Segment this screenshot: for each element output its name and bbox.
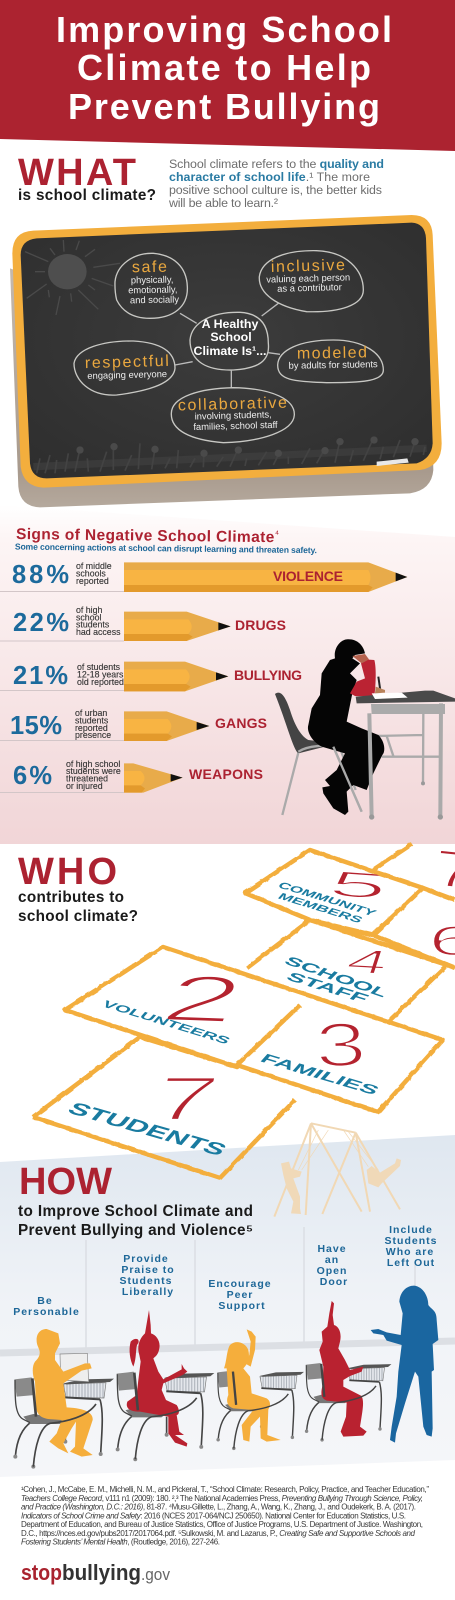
teacher: include students who are left out	[371, 1224, 438, 1443]
bubble: a healthy school climate is	[194, 317, 266, 358]
heading: who: school climate?	[18, 908, 138, 925]
stat: 15% of urban students reported gang presence: reported	[75, 723, 108, 733]
stat: 88% of middle schools reported violence	[12, 561, 343, 589]
heading: who	[18, 851, 138, 925]
footnotes: Teachers College Record, v111 n1 (2009): 180. ²,³ The National Academies Press, Preventing Bullying Through Science, Policy,	[21, 1494, 423, 1503]
student at desk: encourage peer support	[208, 1278, 304, 1450]
stat: 15% of urban students reported gang presence: students	[75, 716, 109, 726]
hopscotch labels: SCHOOL	[281, 954, 392, 1000]
student at desk: encourage peer support: Peer	[227, 1289, 253, 1301]
student at desk: be personable: Personable	[13, 1306, 80, 1318]
stat: 22% of high school students had access to drugs: students	[76, 620, 110, 630]
title banner: Prevent Bullying	[68, 86, 380, 127]
student at desk: be personable: Be	[37, 1295, 53, 1307]
bubble: respectful	[85, 353, 169, 381]
footnotes: ¹Cohen, J., McCabe, E. M., Michelli, N. M., and Pickeral, T., “School Climate: Research, Policy, Practice, and Teacher Education,”	[21, 1485, 429, 1494]
heading: signs of negative school climate: Signs of Negative School Climate	[16, 526, 274, 546]
pencil bar: gangs 15%	[124, 711, 209, 741]
bubble: inclusive: as a contributor	[277, 281, 342, 294]
teacher: include students who are left out: Students	[385, 1235, 437, 1247]
student at desk: have an open door: Door	[320, 1276, 348, 1288]
logo: stopbullying.gov: .gov	[141, 1565, 170, 1584]
footnotes: D.C., https://nces.ed.gov/pubs2017/2017064.pdf. ⁵Sulkowski, M. and Lazarus, P., Creating Safe and Supportive Schools and	[21, 1529, 416, 1538]
hopscotch labels: COMMUNITY	[275, 881, 379, 919]
hopscotch labels: STAFF	[283, 970, 372, 1005]
heading: signs of negative school climate: ⁴	[275, 529, 279, 540]
hopscotch numbers: 3	[314, 1009, 368, 1080]
stat: 21% of students 12-18 years old reported bullying: BULLYING	[234, 667, 302, 683]
stat: 15% of urban students reported gang presence: GANGS	[215, 715, 267, 731]
illustration: student slumped at desk	[275, 639, 455, 820]
hopscotch numbers	[147, 839, 455, 1134]
stat: 6% of high school students threatened or injured with weapons: of high school	[66, 759, 120, 769]
heading: what	[18, 152, 156, 204]
footnotes: Fostering Students’ Mental Health, (Routledge, 2016), 227-246.	[21, 1538, 220, 1546]
stat: 22% of high school students had access to drugs: of high	[76, 605, 103, 615]
illustration: swing set	[274, 1123, 401, 1217]
pencil bar: bullying 21%	[124, 662, 228, 691]
logo: stopbullying.gov: bullying	[62, 1560, 141, 1585]
heading: how: Prevent Bullying and Violence⁵	[18, 1222, 253, 1239]
stat: 22% of high school students had access to drugs: DRUGS	[235, 617, 286, 633]
bubble: inclusive	[266, 257, 351, 294]
student at desk: encourage peer support: Encourage	[208, 1278, 272, 1290]
stat: 6% of high school students threatened or injured with weapons: threatened	[66, 774, 108, 784]
student at desk: have an open door: Open	[317, 1265, 347, 1277]
stat: 22% of high school students had access to drugs: had access	[76, 627, 121, 637]
bubble: collaborative	[178, 395, 288, 432]
bubble: respectful: respectful	[85, 353, 169, 372]
bubble: safe: and socially	[130, 293, 179, 305]
pencil bar: drugs 22%	[124, 612, 231, 641]
footnotes: and Practice (Washington, D.C.: 2016), 81-87. ⁴Musu-Gillette, L., Zhang, A., Wang, K., Zhang, J., and Oudekerk, B. A. (2017).	[21, 1502, 416, 1512]
classroom window frames	[0, 1227, 455, 1353]
row dividers	[0, 592, 124, 792]
icon: chalk stick	[377, 458, 409, 466]
student at desk: encourage peer support: Support	[218, 1300, 266, 1312]
panel: signs of negative school climate	[0, 505, 455, 844]
stat: 15% of urban students reported gang presence: presence	[75, 730, 111, 740]
stat: 6% of high school students threatened or injured with weapons: or injured	[66, 781, 103, 791]
student at desk: provide praise to students liberally: Provide	[123, 1253, 169, 1265]
bubble: safe: emotionally,	[128, 284, 178, 295]
hopscotch labels: MEMBERS	[275, 892, 365, 926]
logo: stopbullying.gov	[21, 1560, 170, 1585]
hopscotch labels: FAMILIES	[256, 1052, 382, 1098]
hopscotch numbers: 4	[342, 942, 394, 982]
stat: 21% of students 12-18 years old reported bullying: old reported	[77, 677, 124, 687]
bubble: a healthy school climate is: A Healthy	[202, 317, 258, 331]
text block: definition	[168, 157, 384, 210]
title banner: Improving School	[56, 9, 392, 50]
bubble: safe	[128, 258, 179, 305]
footnotes: Department of Education, and Bureau of Justice Statistics, Office of Justice Programs, U.S. Department of Justice. Washington,	[21, 1520, 423, 1529]
bubble: a healthy school climate is: Climate Is¹...	[194, 344, 266, 358]
stat: 6% of high school students threatened or injured with weapons: WEAPONS	[189, 766, 263, 782]
hopscotch labels	[63, 881, 392, 1160]
bubble: safe: safe	[132, 259, 167, 276]
bubble: modeled: by adults for students	[288, 358, 378, 371]
stat: 15% of urban students reported gang presence: of urban	[75, 708, 107, 718]
text block: definition: will be able to learn.²	[168, 196, 278, 210]
title banner: Climate to Help	[77, 47, 371, 88]
stat: 21% of students 12-18 years old reported bullying: of students	[77, 662, 121, 672]
heading: how: HOW	[19, 1161, 112, 1203]
bubble: inclusive: valuing each person	[266, 271, 350, 285]
stat: 22% of high school students had access to drugs: school	[76, 612, 101, 622]
mind map connectors	[175, 303, 280, 388]
stat: 21% of students 12-18 years old reported bullying: 21%	[13, 662, 68, 690]
text block: definition: character of school life.¹ The more	[169, 170, 370, 184]
bubble: collaborative: families, school staff	[193, 419, 278, 432]
logo: stopbullying.gov: stop	[21, 1560, 62, 1585]
heading: what: is school climate?	[18, 187, 156, 204]
title banner	[0, 0, 455, 151]
pencil bar: violence 88%	[124, 562, 407, 592]
stat: 15% of urban students reported gang presence: 15%	[10, 712, 62, 740]
pencil bar: weapons 6%	[124, 763, 183, 793]
text block: definition: positive school culture is, the better kids	[169, 183, 382, 197]
bubble: respectful: engaging everyone	[87, 368, 167, 381]
heading: who: contributes to	[18, 889, 124, 906]
stat: 6% of high school students threatened or injured with weapons: 6%	[13, 762, 52, 790]
student at desk: provide praise to students liberally: Praise to	[121, 1264, 175, 1276]
bubble: a healthy school climate is: School	[210, 330, 252, 344]
stat: 88% of middle schools reported violence: VIOLENCE	[273, 568, 343, 584]
stat: 88% of middle schools reported violence: schools	[76, 568, 106, 578]
stat: 21% of students 12-18 years old reported bullying: 12-18 years	[77, 670, 124, 680]
footnotes	[21, 1485, 429, 1546]
hopscotch labels: VOLUNTEERS	[99, 999, 233, 1047]
bubble: inclusive: inclusive	[271, 257, 345, 276]
hopscotch labels: STUDENTS	[63, 1099, 231, 1160]
icon: chalk sun	[25, 240, 120, 315]
hopscotch grid	[33, 844, 455, 1178]
student at desk: provide praise to students liberally: Liberally	[122, 1286, 174, 1298]
hopscotch numbers: 2	[153, 962, 253, 1037]
hopscotch numbers: 7	[147, 1065, 225, 1134]
bubble: modeled	[288, 344, 378, 371]
bubble outlines	[74, 251, 383, 443]
bubble: collaborative: collaborative	[178, 395, 287, 414]
stat: 6% of high school students threatened or injured with weapons: students were	[66, 766, 121, 776]
heading: what: WHAT	[18, 152, 136, 194]
chalkboard	[10, 215, 442, 507]
hopscotch numbers: 5	[324, 863, 393, 907]
stat: 88% of middle schools reported violence: reported	[76, 576, 109, 586]
heading: how	[18, 1161, 253, 1239]
student at desk: have an open door	[305, 1243, 391, 1442]
heading: how: to Improve School Climate and	[18, 1203, 253, 1220]
bubble: collaborative: involving students,	[194, 408, 272, 422]
teacher: include students who are left out: Include	[389, 1224, 433, 1236]
heading: signs of negative school climate: Some concerning actions at school can disrupt learning and threaten safety.	[15, 541, 317, 555]
teacher: include students who are left out: Left Out	[387, 1257, 435, 1269]
stat: 6% of high school students threatened or injured with weapons	[13, 759, 263, 791]
stat: 21% of students 12-18 years old reported bullying	[13, 662, 302, 690]
student at desk: be personable	[13, 1295, 114, 1469]
stat: 88% of middle schools reported violence: of middle	[76, 561, 112, 571]
bubble: safe: physically,	[131, 274, 174, 285]
student at desk: provide praise to students liberally: Students	[120, 1275, 172, 1287]
heading: signs of negative school climate	[15, 526, 317, 555]
text block: definition: School climate refers to the quality and	[169, 157, 384, 171]
stat: 22% of high school students had access to drugs	[13, 605, 286, 637]
footnotes: Indicators of School Crime and Safety: 2016 (NCES 2017-064/NCJ 250650). National Center for Education Statistics, U.S.	[21, 1512, 406, 1520]
stat: 88% of middle schools reported violence: 88%	[12, 561, 69, 589]
chalk grass and flowers	[33, 438, 427, 473]
stat: 15% of urban students reported gang presence	[10, 708, 267, 740]
student at desk: provide praise to students liberally	[116, 1253, 214, 1461]
heading: who: WHO	[18, 851, 117, 893]
teacher: include students who are left out: Who are	[386, 1246, 434, 1258]
student at desk: have an open door: an	[325, 1254, 339, 1266]
stat: 22% of high school students had access to drugs: 22%	[13, 609, 69, 637]
bubble: modeled: modeled	[297, 344, 367, 363]
student at desk: have an open door: Have	[317, 1243, 347, 1255]
panel: how background	[0, 1135, 455, 1477]
